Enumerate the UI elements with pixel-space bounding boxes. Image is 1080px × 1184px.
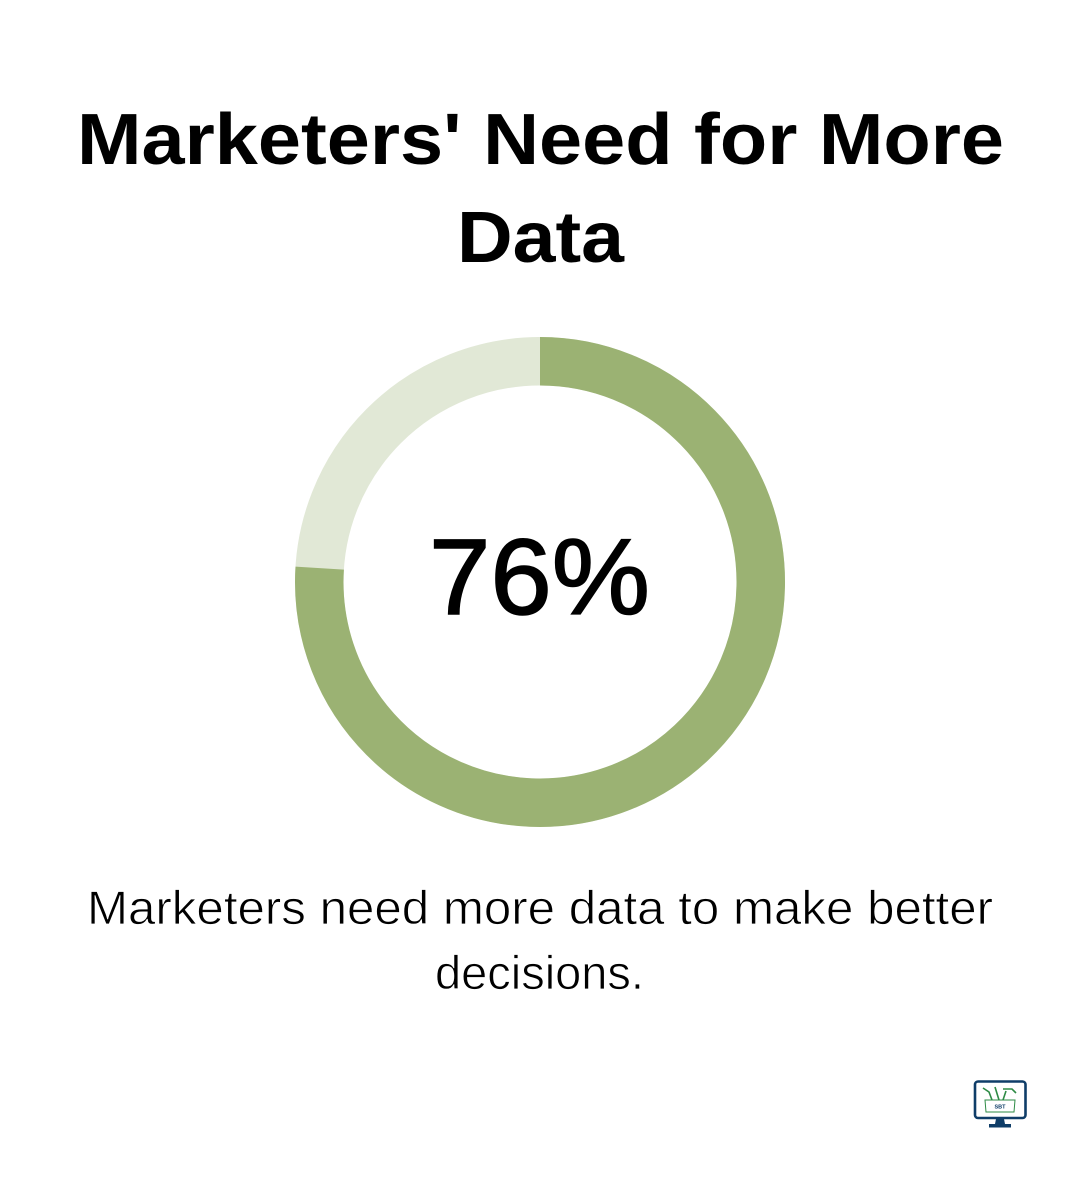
title: Data [457, 198, 625, 278]
description text: Marketers need more data to make better [87, 882, 993, 935]
center value: 76% [429, 516, 650, 637]
title: Marketers' Need for More [77, 100, 1004, 180]
icon: SBT monitor logo [975, 1082, 1026, 1128]
title [77, 100, 1004, 278]
description text: decisions. [435, 947, 644, 1000]
donut chart: 76% [319, 361, 761, 803]
description text [87, 882, 993, 1000]
icon: SBT monitor logo: SBT [994, 1104, 1006, 1110]
